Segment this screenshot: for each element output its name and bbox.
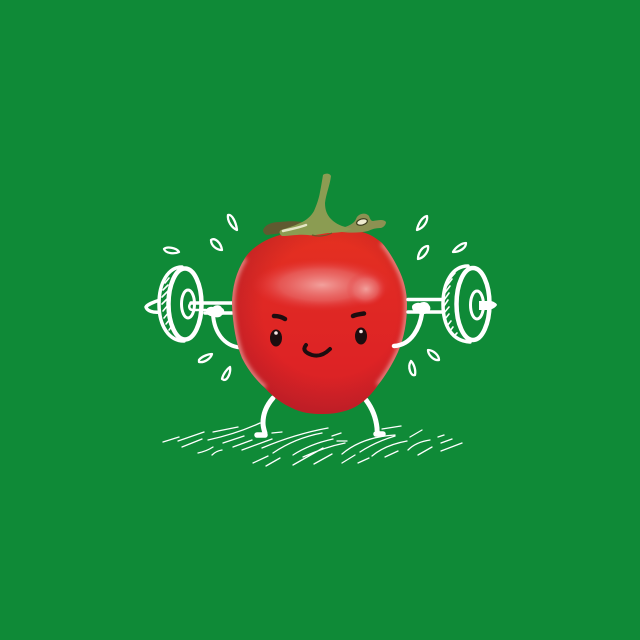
left wheel face — [168, 268, 202, 340]
right barbell — [394, 266, 497, 346]
stem and calyx body — [280, 174, 352, 236]
highlight — [261, 262, 380, 308]
left barbell — [146, 267, 240, 348]
tomato body — [232, 232, 407, 414]
tomato — [232, 232, 407, 414]
right wheel hatch — [444, 273, 457, 336]
right eyebrow — [353, 314, 364, 316]
right end cap — [479, 301, 497, 310]
stem and calyx — [263, 174, 386, 236]
right wheel face — [456, 268, 490, 340]
left hand — [206, 305, 224, 317]
left eye — [270, 330, 282, 346]
bright spot — [354, 276, 383, 304]
right bar — [408, 300, 445, 312]
left foot — [257, 432, 265, 438]
left eyebrow — [274, 316, 285, 319]
right arm — [394, 313, 422, 346]
dark sepal left — [263, 221, 302, 235]
left wheel hatch — [162, 278, 172, 330]
left end cap — [146, 300, 161, 312]
dark underside — [312, 233, 332, 236]
left leg — [263, 398, 273, 433]
left wheel back — [159, 267, 184, 341]
right leg — [366, 400, 378, 433]
illustration: tomato weightlifter — [144, 174, 497, 467]
edge and lower shading — [232, 232, 386, 414]
right hand — [412, 302, 430, 314]
sweat drops — [164, 215, 466, 380]
right wheel back — [443, 266, 470, 342]
left hub — [182, 290, 194, 318]
ground hatching — [163, 423, 462, 466]
right sepal — [342, 214, 386, 233]
face — [270, 314, 367, 356]
right hub — [470, 291, 484, 319]
pale rim — [232, 243, 407, 388]
right foot — [376, 431, 383, 437]
sepal curl — [356, 218, 368, 226]
left bar — [191, 303, 232, 313]
smile — [304, 345, 330, 356]
left arm — [213, 314, 240, 348]
calyx pale edge — [283, 225, 306, 231]
right eye — [355, 328, 367, 344]
